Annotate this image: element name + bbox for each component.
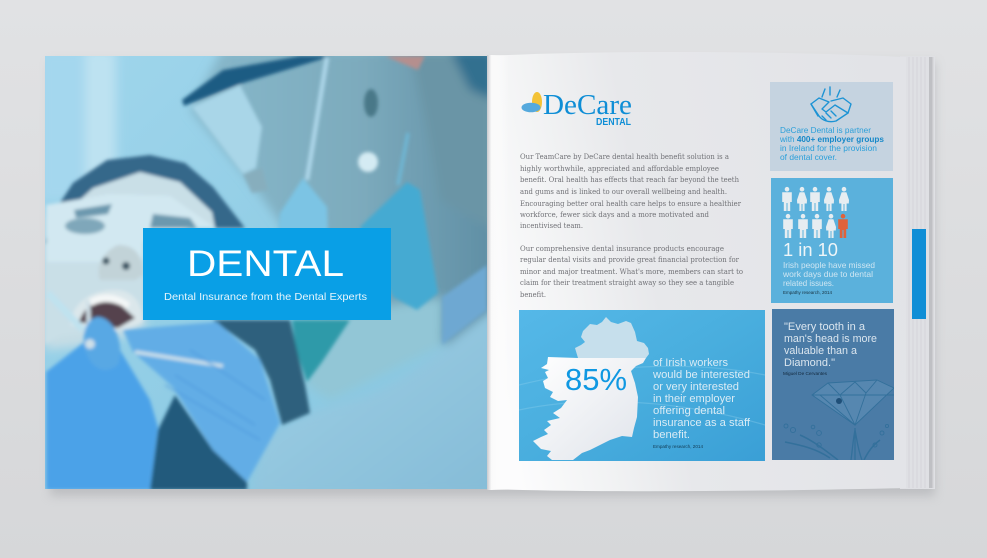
quote: Diamond." [784, 357, 835, 369]
tab marker [912, 229, 926, 319]
panel: 85 percent map [519, 310, 765, 461]
text block: products paragraph: benefit. [520, 290, 546, 299]
text block: products paragraph: Our comprehensive dental insurance products encourage [520, 244, 724, 253]
text block: intro paragraph: incentivised team. [520, 221, 583, 230]
book shadow [50, 62, 935, 496]
gloves [46, 343, 158, 490]
icon: diamond and splash [784, 380, 894, 460]
page edges: right stack [900, 56, 935, 489]
logo: DeCare Dental [522, 90, 632, 128]
text: interested workers: of Irish workers [653, 357, 728, 369]
text: interested workers: offering dental [653, 405, 725, 417]
source: Empathy research, 2014 [783, 290, 832, 295]
panel: diamond quote [772, 309, 894, 460]
text: partner statement: of dental cover. [780, 152, 837, 162]
panel: employer groups [770, 82, 893, 171]
text block: products paragraph: claim for their treatment straight away so they see a tangible [520, 278, 734, 287]
text block: products paragraph [520, 244, 743, 299]
text: missed work days: work days due to dental [782, 269, 873, 279]
stat: 1 in 10: 1 in 10 [783, 239, 838, 260]
panel: left page photo [40, 50, 495, 495]
map: Ireland [533, 317, 649, 460]
text: partner statement: DeCare Dental is partner [780, 125, 871, 135]
logo wordmark: DeCare [543, 90, 632, 121]
source: Empathy research, 2014 [653, 444, 704, 449]
text: missed work days [782, 260, 875, 288]
subheading: Dental Insurance from the Dental Experts [164, 291, 367, 303]
quote: valuable than a [784, 345, 858, 357]
icon: logo mark [522, 92, 542, 112]
quote [784, 321, 877, 369]
icon group: people [782, 187, 849, 238]
text block: intro paragraph: benefit. Oral health has effects that reach far beyond the teeth [520, 175, 739, 184]
quote attribution: Miguel De Cervantes [783, 371, 828, 376]
quote: man's head is more [784, 333, 877, 345]
panel: right page [487, 52, 906, 491]
text: interested workers: insurance as a staff [653, 417, 750, 429]
heading: DENTAL: DENTAL [187, 243, 344, 284]
text: interested workers: or very interested [653, 381, 739, 393]
text: missed work days: Irish people have missed [783, 260, 875, 270]
text: interested workers: benefit. [653, 429, 690, 441]
text: missed work days: related issues. [783, 278, 834, 288]
text: partner statement: in Ireland for the provision [780, 143, 877, 153]
patient face and goggles [45, 172, 215, 345]
text block: intro paragraph: and gums and is linked to our overall wellbeing and health. [520, 187, 727, 196]
text block: intro paragraph: Encouraging better oral health care helps to ensure a healthier [520, 199, 741, 208]
text block: intro paragraph: workforce, fewer sick days and a more motivated and [520, 210, 709, 219]
patient hair top [45, 155, 245, 245]
text: partner statement: with 400+ employer groups [779, 134, 884, 144]
title box [143, 228, 391, 320]
quote: "Every tooth in a [784, 321, 866, 333]
text: partner statement [779, 125, 884, 162]
text: interested workers: in their employer [653, 393, 735, 405]
icon: handshake [811, 87, 851, 122]
panel: 1 in 10 [771, 178, 893, 303]
stat: 85%: 85% [565, 362, 627, 397]
text block: intro paragraph: Our TeamCare by DeCare dental health benefit solution is a [520, 152, 729, 161]
text: interested workers: would be interested [652, 369, 750, 381]
text: interested workers [652, 357, 750, 441]
text block: intro paragraph [520, 152, 741, 230]
logo subtext: DENTAL [596, 117, 631, 128]
hair lower [213, 320, 310, 425]
text block: products paragraph: regular dental visits and provide great financial protection for [520, 255, 739, 264]
text block: intro paragraph: highly worthwhile, appreciated and affordable employee [520, 164, 719, 173]
text block: products paragraph: minor and major treatment. What's more, members can start to [520, 267, 743, 276]
